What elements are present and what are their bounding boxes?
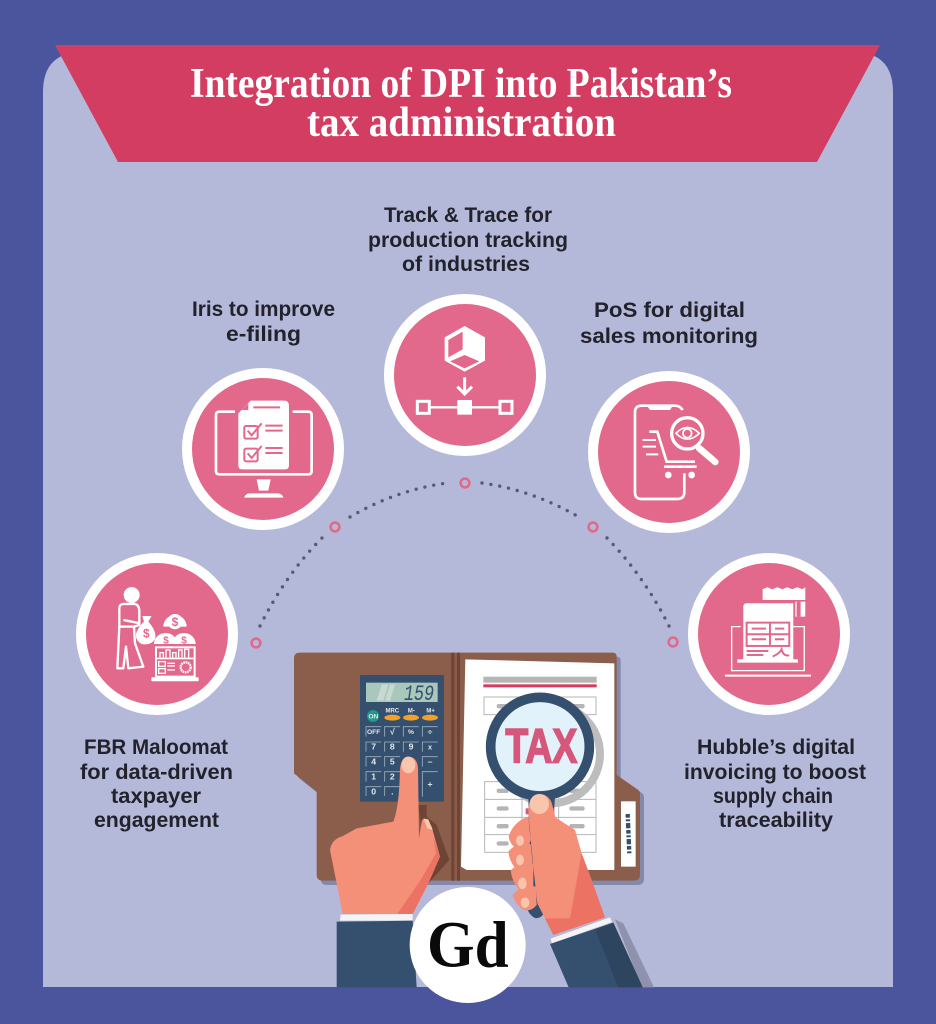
icon: person with money bags and laptop: $ xyxy=(181,635,187,646)
document xyxy=(461,659,636,870)
title xyxy=(190,61,732,146)
calculator: 2 xyxy=(390,772,395,782)
icon: person with money bags and laptop: $ xyxy=(143,626,150,640)
circle: Hubble xyxy=(693,558,845,710)
calculator: √ xyxy=(390,726,395,736)
right sleeve xyxy=(550,917,643,987)
label: PoS: PoS for digital xyxy=(594,299,745,322)
calculator: M- xyxy=(408,709,415,715)
folder xyxy=(294,653,644,885)
calculator: ON xyxy=(368,714,379,721)
logo: Gd: Gd xyxy=(427,909,509,982)
title: tax administration xyxy=(307,100,616,146)
label: FBR Maloomat: for data-driven xyxy=(80,761,233,784)
label: PoS: sales monitoring xyxy=(580,325,758,348)
calculator: M+ xyxy=(426,709,435,715)
calculator xyxy=(360,675,444,802)
title: Integration of DPI into Pakistan’s xyxy=(190,61,732,107)
calculator: . xyxy=(391,786,394,796)
label: FBR Maloomat: taxpayer xyxy=(111,785,201,808)
shadow under left hand xyxy=(413,805,449,885)
label: FBR Maloomat xyxy=(80,736,233,832)
label: Hubble: invoicing to boost xyxy=(684,761,866,784)
calculator: + xyxy=(427,779,433,789)
calculator: MRC xyxy=(386,709,400,715)
dotted arc xyxy=(260,483,669,626)
icon: digital invoice on laptop xyxy=(725,587,811,677)
magnifying glass xyxy=(491,697,600,918)
title banner xyxy=(55,45,880,162)
calculator: OFF xyxy=(367,729,380,736)
calculator: 7 xyxy=(371,742,376,752)
left sleeve xyxy=(337,914,417,987)
illustration: tax folder with calculator and magnifier xyxy=(294,653,654,1003)
calculator: 4 xyxy=(371,757,376,767)
calculator: 5 xyxy=(390,757,395,767)
magnifying glass: TAX xyxy=(505,720,578,774)
label: Iris: e-filing xyxy=(226,323,301,346)
label: FBR Maloomat: FBR Maloomat xyxy=(84,736,228,759)
icon: cube and tracking line xyxy=(417,326,512,415)
left hand pressing calculator xyxy=(330,757,440,914)
icon: phone with cart and magnifier xyxy=(635,406,715,499)
shadow under right sleeve xyxy=(615,919,654,987)
circle: Iris xyxy=(187,373,339,525)
label: Iris xyxy=(192,298,335,346)
side tab label xyxy=(621,801,636,867)
circle: PoS xyxy=(593,376,745,528)
label: Iris: Iris to improve xyxy=(192,298,335,321)
right hand holding magnifier xyxy=(508,794,605,935)
calculator: – xyxy=(428,757,433,767)
calculator: 0 xyxy=(371,786,376,796)
label: Hubble: Hubble’s digital xyxy=(697,736,855,759)
icon: monitor with checklist xyxy=(216,401,312,498)
label: Track and Trace: Track & Trace for xyxy=(384,204,552,227)
label: Hubble: supply chain xyxy=(713,785,833,808)
label: Track and Trace: production tracking xyxy=(368,229,568,252)
arc markers xyxy=(252,479,677,647)
icon: person with money bags and laptop xyxy=(117,587,199,681)
calculator: 9 xyxy=(409,742,414,752)
logo: Gd xyxy=(410,887,526,1003)
calculator: x xyxy=(428,742,433,751)
label: Hubble xyxy=(684,736,866,832)
calculator: 159 xyxy=(404,682,434,707)
icon: person with money bags and laptop: $ xyxy=(163,635,169,646)
label: Track and Trace: of industries xyxy=(402,253,530,276)
calculator: 8 xyxy=(390,742,395,752)
calculator: % xyxy=(408,729,414,736)
label: Track and Trace xyxy=(368,204,568,276)
label: Hubble: traceability xyxy=(719,809,833,832)
icon: person with money bags and laptop: $ xyxy=(172,615,179,629)
circle: FBR Maloomat xyxy=(81,558,233,710)
label: FBR Maloomat: engagement xyxy=(94,809,219,832)
circle: Track and Trace xyxy=(389,299,541,451)
label: PoS xyxy=(580,299,758,348)
calculator: 1 xyxy=(371,772,376,782)
calculator: ÷ xyxy=(428,726,433,736)
